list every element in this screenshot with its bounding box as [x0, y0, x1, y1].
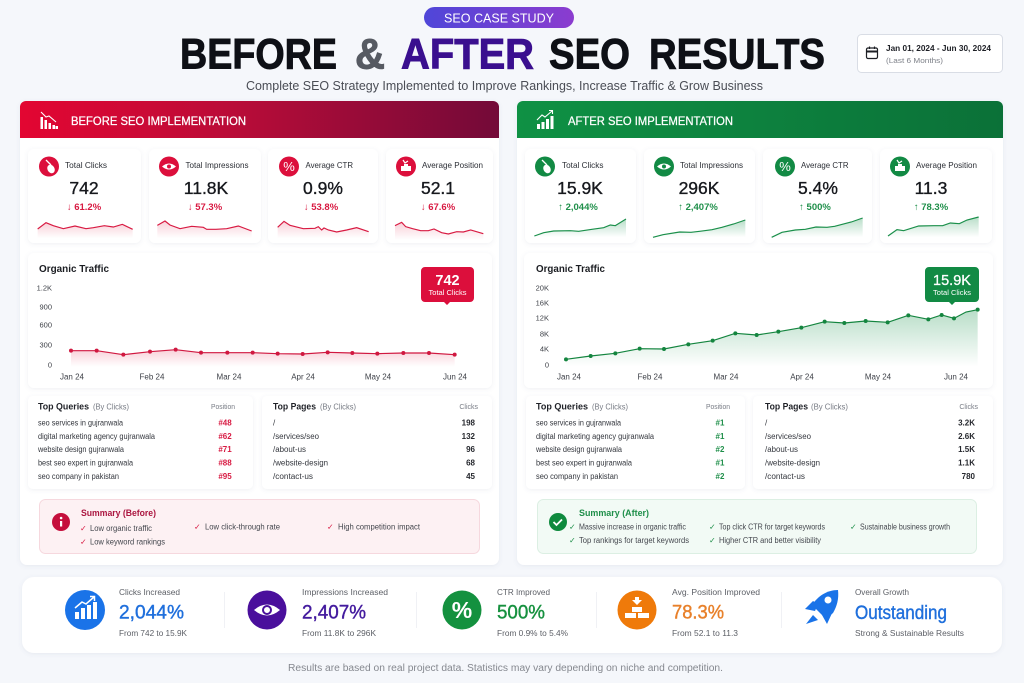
table: top queries after: #1 [716, 432, 725, 441]
y axis labels: 16K [536, 298, 549, 308]
KPI card: average position after: 11.3 [915, 178, 947, 198]
y axis labels: 1.2K [37, 284, 52, 292]
callout: summary after: ✓ [709, 522, 716, 532]
panel: results strip [22, 577, 1002, 653]
y axis labels: 8K [540, 330, 549, 338]
table: top pages before: / [273, 418, 276, 428]
callout: summary after: Sustainable business growth [860, 522, 950, 532]
table: top queries after: best seo expert in gujranwala [536, 458, 633, 468]
table: top pages before: (By Clicks) [320, 402, 356, 412]
title: AFTER [401, 32, 534, 78]
table: top pages before: /about-us [273, 445, 306, 454]
stat: clicks increased [65, 588, 188, 638]
callout: 15.9K total clicks [925, 267, 979, 305]
title [180, 32, 825, 78]
table: top pages after: 780 [962, 472, 976, 481]
stat: overall growth [805, 588, 964, 638]
table: top pages before: 45 [466, 472, 476, 481]
sparkline [395, 222, 483, 240]
callout: 15.9K total clicks: 15.9K [933, 273, 971, 289]
table: top queries before: #62 [218, 432, 232, 441]
stat: CTR improved: 500% [497, 602, 545, 624]
x axis labels: Feb 24 [140, 372, 165, 382]
KPI card: total clicks before [28, 149, 141, 243]
stat: clicks increased: 2,044% [119, 602, 184, 624]
table: top pages before: /website-design [273, 458, 328, 468]
icon: eye [654, 156, 674, 176]
table: top pages after: /about-us [765, 445, 798, 454]
table: top queries before: #95 [218, 472, 232, 481]
stat: CTR improved: From 0.9% to 5.4% [497, 629, 568, 638]
sparkline [38, 223, 133, 238]
icon: percent: % [779, 159, 791, 174]
sparkline [888, 217, 979, 237]
x axis labels: Mar 24 [217, 372, 242, 382]
KPI card: average position after: ↑ 78.3% [914, 202, 949, 213]
table: top pages before: 96 [466, 445, 476, 454]
y axis labels: 4K [540, 344, 549, 354]
table: top queries after: digital marketing agency gujranwala [536, 432, 655, 441]
table: top queries before: (By Clicks) [93, 402, 129, 412]
x axis labels: Mar 24 [714, 372, 739, 382]
KPI card: average position before: Average Position [422, 160, 483, 170]
table: top queries before: seo services in gujranwala [38, 418, 123, 428]
stat: average position improved [618, 588, 760, 638]
title: SEO [549, 32, 630, 78]
table: top pages before: Clicks [459, 404, 478, 411]
KPI card: average CTR before: ↓ 53.8% [304, 202, 339, 213]
y axis labels: 900 [39, 302, 52, 312]
chart: organic traffic after: Organic Traffic [536, 263, 605, 275]
stat: impressions increased: Impressions Increased [302, 588, 388, 597]
KPI card: total impressions after: 296K [679, 178, 720, 198]
callout: summary before: Summary (Before) [81, 508, 156, 519]
KPI card: total clicks after [525, 149, 636, 243]
icon: position [890, 156, 910, 176]
callout: 742 total clicks [421, 267, 474, 305]
table: top pages after: /services/seo [765, 432, 812, 441]
table: top pages after: 2.6K [958, 432, 975, 441]
x axis labels [557, 372, 969, 382]
stat: overall growth: Strong & Sustainable Results [855, 629, 964, 638]
KPI card: total clicks before: Total Clicks [65, 160, 107, 170]
date range box [858, 34, 1002, 72]
table: top pages after: 3.2K [958, 418, 975, 428]
table: top pages after [753, 396, 993, 489]
table: top queries after: #2 [716, 445, 725, 454]
callout: summary before: Low click-through rate [205, 522, 281, 532]
table: top pages before: 132 [462, 432, 476, 441]
stat: CTR improved [442, 588, 568, 638]
KPI card: average position before: ↓ 67.6% [421, 202, 456, 213]
KPI card: average CTR after: ↑ 500% [799, 202, 831, 213]
chart: organic traffic before [28, 253, 492, 388]
callout: summary after [538, 500, 976, 554]
sparkline [278, 221, 369, 238]
callout: 742 total clicks: 742 [435, 273, 460, 289]
icon: percent: % [283, 159, 295, 174]
callout: summary after: Higher CTR and better visibility [719, 536, 821, 545]
table: top pages after: /contact-us [765, 472, 805, 481]
callout: summary after: Top rankings for target keywords [579, 536, 689, 545]
icon: calendar [866, 46, 878, 58]
x axis labels: Jan 24 [60, 372, 85, 382]
stat: impressions increased [248, 588, 388, 638]
table: top queries after: #1 [716, 458, 725, 468]
callout: summary before: ✓ [194, 522, 201, 532]
callout: summary after: Summary (After) [579, 508, 649, 519]
table: top queries before: digital marketing agency gujranwala [38, 432, 156, 441]
panel: after SEO [517, 101, 1003, 565]
after header bar: AFTER SEO IMPLEMENTATION [568, 114, 733, 128]
table: top pages before: /contact-us [273, 472, 313, 481]
KPI card: average position before: 52.1 [421, 178, 455, 198]
stat: impressions increased: From 11.8K to 296K [302, 629, 377, 638]
sparkline [772, 218, 863, 237]
stat: clicks increased: From 742 to 15.9K [119, 629, 188, 638]
callout: summary after: ✓ [850, 522, 857, 532]
sparkline [157, 221, 252, 238]
table: top pages after: 1.5K [958, 445, 975, 454]
badge: SEO case study: SEO CASE STUDY [444, 12, 555, 26]
table: top queries before: Position [211, 404, 235, 411]
icon: declining bars [40, 112, 58, 129]
y axis labels: 0 [48, 360, 52, 370]
KPI card: total impressions after [644, 149, 755, 243]
x axis labels: Jun 24 [944, 372, 969, 382]
KPI card: average CTR after: Average CTR [801, 160, 848, 170]
sparkline [653, 220, 745, 237]
callout: 15.9K total clicks: Total Clicks [933, 288, 971, 297]
stat: overall growth: Outstanding [855, 603, 947, 624]
x axis labels: Feb 24 [638, 372, 663, 382]
callout: summary before: Low organic traffic [90, 524, 152, 533]
callout: summary after: ✓ [709, 536, 716, 545]
KPI card: average position before [386, 149, 493, 243]
x axis labels: Apr 24 [790, 372, 814, 382]
KPI card: average CTR before: 0.9% [303, 178, 343, 198]
table: top pages before: /services/seo [273, 432, 320, 441]
table: top queries after [526, 396, 745, 489]
table: top queries after: #2 [716, 472, 725, 481]
callout: summary before: Low keyword rankings [90, 538, 165, 546]
footer note: Results are based on real project data. Statistics may vary depending on niche and competition. [288, 663, 723, 674]
title: RESULTS [649, 32, 825, 78]
date range box: Jan 01, 2024 - Jun 30, 2024 [886, 43, 991, 53]
callout: summary before: ✓ [80, 538, 87, 546]
icon: rising chart [65, 590, 105, 630]
KPI card: total impressions before: 11.8K [184, 178, 229, 198]
panel: before SEO [20, 101, 499, 565]
table: top pages before: Top Pages [273, 402, 316, 412]
icon: info [52, 513, 70, 531]
KPI card: total clicks after: 15.9K [557, 178, 603, 198]
table: top queries after: (By Clicks) [592, 402, 628, 412]
icon: click [39, 156, 59, 176]
y axis labels [536, 284, 549, 370]
chart: organic traffic before: Organic Traffic [39, 263, 109, 275]
table: top queries after: seo company in pakistan [536, 472, 618, 481]
stat: impressions increased: 2,407% [302, 602, 366, 624]
table: top queries after: Position [706, 404, 730, 411]
y axis labels [37, 284, 52, 370]
KPI card: average CTR before [268, 149, 378, 243]
KPI card: total clicks after: ↑ 2,044% [558, 202, 598, 213]
table: top queries before: seo company in pakistan [38, 472, 119, 481]
icon: percent: % [452, 597, 472, 623]
KPI card: average position after [880, 149, 992, 243]
table: top queries before: website design gujranwala [37, 445, 124, 454]
y axis labels: 12K [536, 314, 549, 322]
table: top queries before: #71 [218, 445, 232, 454]
callout: summary after: ✓ [569, 536, 576, 545]
icon: eye [248, 590, 286, 630]
KPI card: total impressions after: ↑ 2,407% [678, 202, 718, 213]
table: top pages after: Top Pages [765, 402, 808, 412]
table: top pages after: / [765, 418, 768, 428]
title: & [355, 32, 385, 78]
icon: eye [159, 156, 179, 176]
stat: average position improved: 78.3% [672, 602, 724, 624]
stat: clicks increased: Clicks Increased [119, 588, 180, 597]
callout: summary before: ✓ [80, 524, 87, 533]
table: top pages after: 1.1K [958, 458, 975, 468]
table: top pages before: 68 [466, 458, 476, 468]
x axis labels: Jun 24 [443, 372, 468, 382]
x axis labels [60, 372, 468, 382]
y axis labels: 600 [39, 320, 52, 330]
icon: podium [618, 590, 656, 630]
before header bar [20, 101, 499, 138]
table: top pages after: (By Clicks) [811, 402, 848, 412]
sparkline [534, 219, 626, 237]
KPI card: total clicks before: ↓ 61.2% [67, 202, 102, 213]
stat: average position improved: Avg. Position Improved [672, 588, 760, 597]
after header bar [517, 101, 1003, 138]
table: top queries before: Top Queries [38, 402, 89, 412]
traffic line after [564, 308, 980, 367]
y axis labels: 20K [536, 284, 549, 292]
table: top queries after: seo services in gujranwala [536, 418, 621, 428]
icon: position [396, 156, 416, 176]
callout: summary before: ✓ [327, 522, 334, 532]
title: BEFORE [180, 32, 337, 78]
icon: rocket [805, 590, 838, 624]
table: top pages before: 198 [462, 418, 476, 428]
callout: summary after: ✓ [569, 522, 576, 532]
KPI card: total impressions before: ↓ 57.3% [188, 202, 223, 213]
stat: overall growth: Overall Growth [855, 588, 909, 597]
stat: CTR improved: CTR Improved [497, 588, 550, 597]
KPI card: total impressions after: Total Impressions [680, 160, 743, 170]
KPI card: average CTR before: Average CTR [306, 160, 353, 170]
callout: summary before [40, 500, 480, 554]
subtitle: Complete SEO Strategy Implemented to Improve Rankings, Increase Traffic & Grow Business [246, 78, 763, 93]
KPI card: total clicks before: 742 [69, 178, 99, 198]
y axis labels: 300 [39, 340, 52, 350]
table: top queries after: website design gujranwala [535, 445, 622, 454]
icon: rising bars [537, 110, 554, 129]
table: top queries after: Top Queries [536, 402, 588, 412]
KPI card: total impressions before [149, 149, 261, 243]
before header bar: BEFORE SEO IMPLEMENTATION [71, 114, 246, 128]
x axis labels: Jan 24 [557, 372, 582, 382]
table: top pages after: Clicks [959, 404, 978, 411]
table: top queries before: #88 [218, 458, 232, 468]
x axis labels: Apr 24 [291, 372, 315, 382]
KPI card: total clicks after: Total Clicks [562, 160, 604, 170]
KPI card: average CTR after [763, 149, 872, 243]
date range box: (Last 6 Months) [886, 56, 944, 65]
KPI card: total impressions before: Total Impressions [186, 160, 248, 170]
traffic line before [69, 348, 457, 367]
x axis labels: May 24 [365, 372, 392, 382]
stat: average position improved: From 52.1 to 11.3 [672, 629, 739, 638]
table: top queries before: best seo expert in gujranwala [38, 458, 134, 468]
table: top pages after: /website-design [765, 458, 820, 468]
icon: click [535, 156, 555, 176]
KPI card: average CTR after: 5.4% [798, 178, 838, 198]
callout: summary before: High competition impact [338, 522, 421, 532]
table: top queries before: #48 [218, 418, 232, 428]
callout: 742 total clicks: Total Clicks [429, 288, 467, 297]
callout: summary after: Top click CTR for target keywords [719, 522, 825, 532]
chart: organic traffic after [524, 253, 993, 388]
callout: summary after: Massive increase in organic traffic [579, 522, 686, 532]
table: top pages before [262, 396, 492, 489]
x axis labels: May 24 [865, 372, 892, 382]
y axis labels: 0 [545, 360, 549, 370]
table: top queries before [28, 396, 253, 489]
badge: SEO case study [424, 7, 574, 28]
table: top queries after: #1 [716, 418, 725, 428]
KPI card: average position after: Average Position [916, 160, 977, 170]
icon: check [549, 513, 567, 531]
